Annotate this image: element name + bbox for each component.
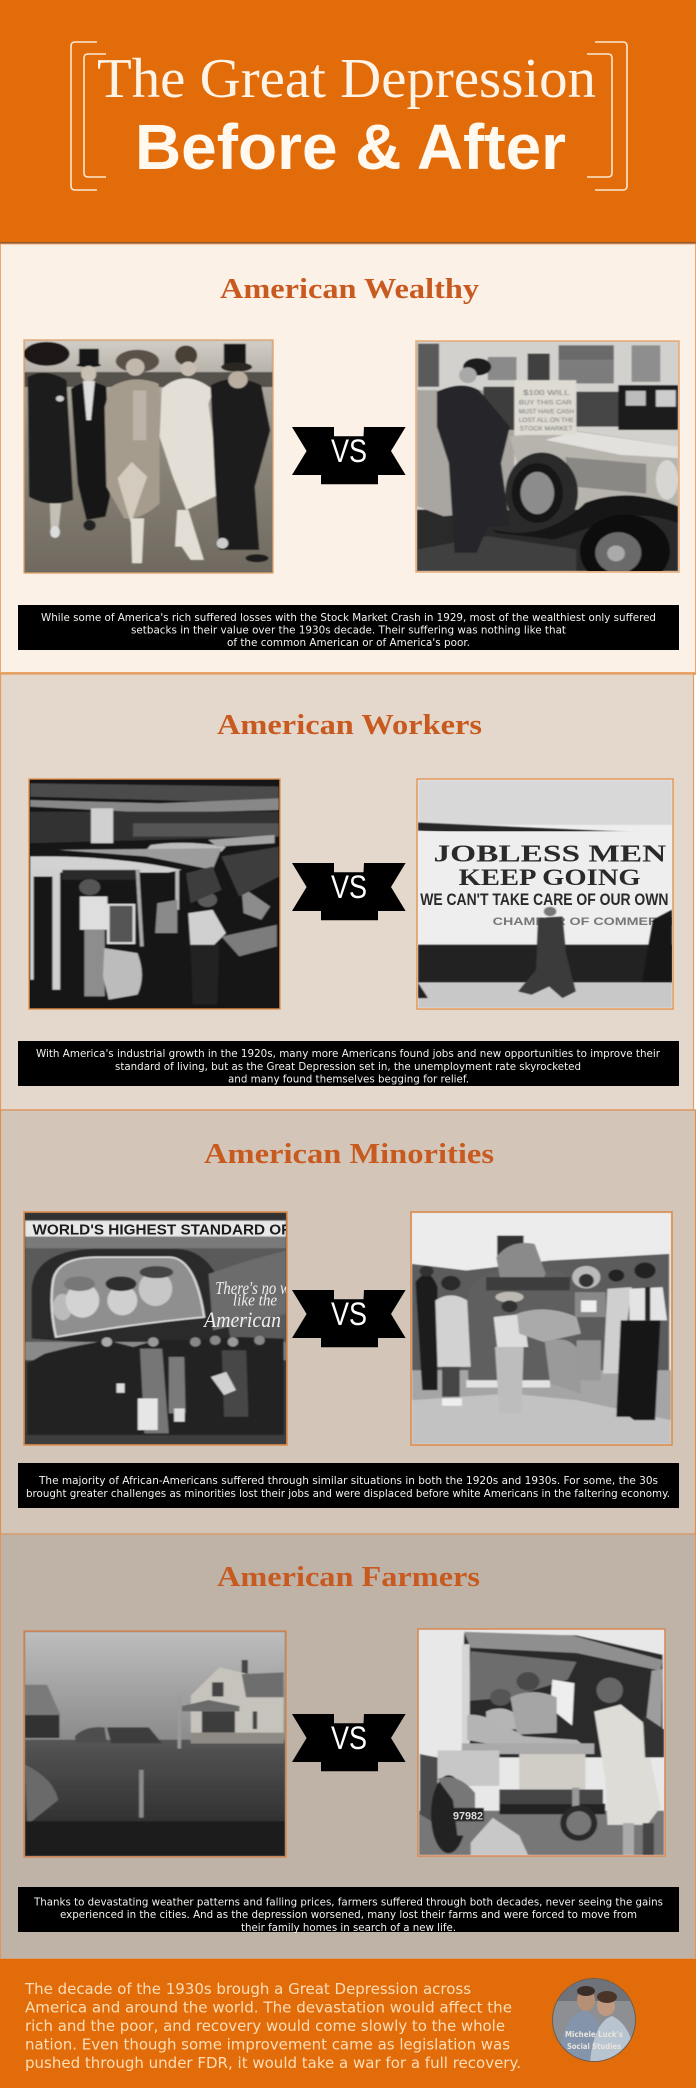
photo: breadline under the American Way billboard [24, 1212, 346, 1445]
photo: investor selling his car after the crash: MUST HAVE CASH [519, 407, 574, 415]
panel: American Workers [0, 674, 694, 1110]
photo: factory assembly line [29, 779, 280, 1009]
photo: jobless men keep going sign: CHAMBER OF COMMERCE [493, 915, 678, 927]
caption: American Farmers: experienced in the cities. And as the depression worsened, many lost their farms and were forced to move from [60, 1910, 637, 1921]
vs ribbon [292, 863, 406, 920]
vs ribbon: VS [331, 1296, 367, 1332]
photo: jobless men keep going sign [417, 779, 678, 1009]
conclusion text: nation. Even though some improvement came as legislation was [25, 2036, 510, 2054]
caption: American Workers: With America's industrial growth in the 1920s, many more Americans found jobs and new opportunities to improve their [36, 1049, 661, 1060]
panel: footer conclusion [0, 1959, 696, 2088]
vs ribbon: VS [331, 433, 367, 469]
vs ribbon [292, 1290, 406, 1347]
heading: American Wealthy: American Wealthy [220, 273, 480, 305]
author portrait badge [552, 1978, 637, 2063]
panel: American Wealthy [0, 244, 696, 675]
vs ribbon: VS [331, 869, 367, 905]
caption: American Workers [18, 1041, 679, 1086]
heading: American Minorities: American Minorities [204, 1138, 494, 1170]
photo: jobless men keep going sign: KEEP GOING [459, 864, 641, 890]
author portrait badge: Social Studies [567, 2042, 621, 2051]
author portrait badge: Michele Luck's [565, 2030, 623, 2039]
photo: investor selling his car after the crash [416, 341, 679, 588]
panel: American Farmers [0, 1534, 696, 1959]
vs ribbon [292, 1714, 406, 1771]
photo: African-American family beside loaded car [411, 1212, 672, 1445]
panel: header [0, 0, 696, 244]
photo: migrant family in a covered truck: 97982 [453, 1809, 483, 1822]
caption: American Wealthy: setbacks in their value over the 1930s decade. Their suffering was nothing like that [131, 626, 566, 636]
title line 2: Before & After [135, 111, 566, 183]
caption: American Farmers: their family homes in search of a new life. [241, 1923, 456, 1934]
conclusion text: America and around the world. The devastation would affect the [25, 1998, 512, 2016]
title brackets [71, 42, 627, 190]
caption: American Wealthy: While some of America's rich suffered losses with the Stock Market Crash in 1929, most of the wealthiest only suffered [41, 613, 656, 624]
conclusion text: pushed through under FDR, it would take a war for a full recovery. [25, 2054, 521, 2072]
photo: investor selling his car after the crash: STOCK MARKET [520, 425, 573, 432]
caption: American Workers: standard of living, but as the Great Depression set in, the unemployment rate skyrocketed [115, 1062, 581, 1073]
caption: American Minorities: brought greater challenges as minorities lost their jobs and were displaced before white Americans in the faltering economy. [26, 1489, 670, 1500]
panel: American Minorities [0, 1110, 696, 1534]
photo: breadline under the American Way billboard: like the [233, 1292, 277, 1310]
caption: American Minorities [18, 1463, 679, 1508]
vs ribbon [292, 427, 406, 484]
photo: investor selling his car after the crash: LOST ALL ON THE [519, 416, 574, 424]
photo: wealthy people strolling in the 1920s [24, 340, 273, 573]
heading: American Workers: American Workers [217, 709, 482, 741]
caption: American Workers: and many found themselves begging for relief. [228, 1074, 469, 1086]
caption: American Wealthy: of the common American or of America's poor. [227, 638, 470, 649]
title line 1: The Great Depression [97, 48, 596, 110]
photo: investor selling his car after the crash: BUY THIS CAR [519, 399, 572, 406]
caption: American Farmers [18, 1887, 679, 1934]
caption: American Farmers: Thanks to devastating weather patterns and falling prices, farmers suffered through both decades, never seeing the gains [33, 1898, 663, 1908]
conclusion text: The decade of the 1930s brough a Great Depression across [24, 1980, 471, 1998]
caption: American Minorities: The majority of African-Americans suffered through similar situations in both the 1920s and 1930s. For some, the 30s [38, 1476, 658, 1487]
photo: farmhouse and field [24, 1631, 286, 1857]
conclusion text [24, 1980, 521, 2072]
photo: migrant family in a covered truck [418, 1629, 665, 1856]
photo: investor selling his car after the crash: $100 WILL [523, 388, 570, 397]
heading: American Farmers: American Farmers [217, 1561, 480, 1593]
photo: jobless men keep going sign: JOBLESS MEN [433, 840, 666, 868]
caption: American Wealthy [18, 605, 679, 650]
vs ribbon: VS [331, 1720, 367, 1756]
conclusion text: rich and the poor, and recovery would come slowly to the whole [25, 2017, 505, 2035]
